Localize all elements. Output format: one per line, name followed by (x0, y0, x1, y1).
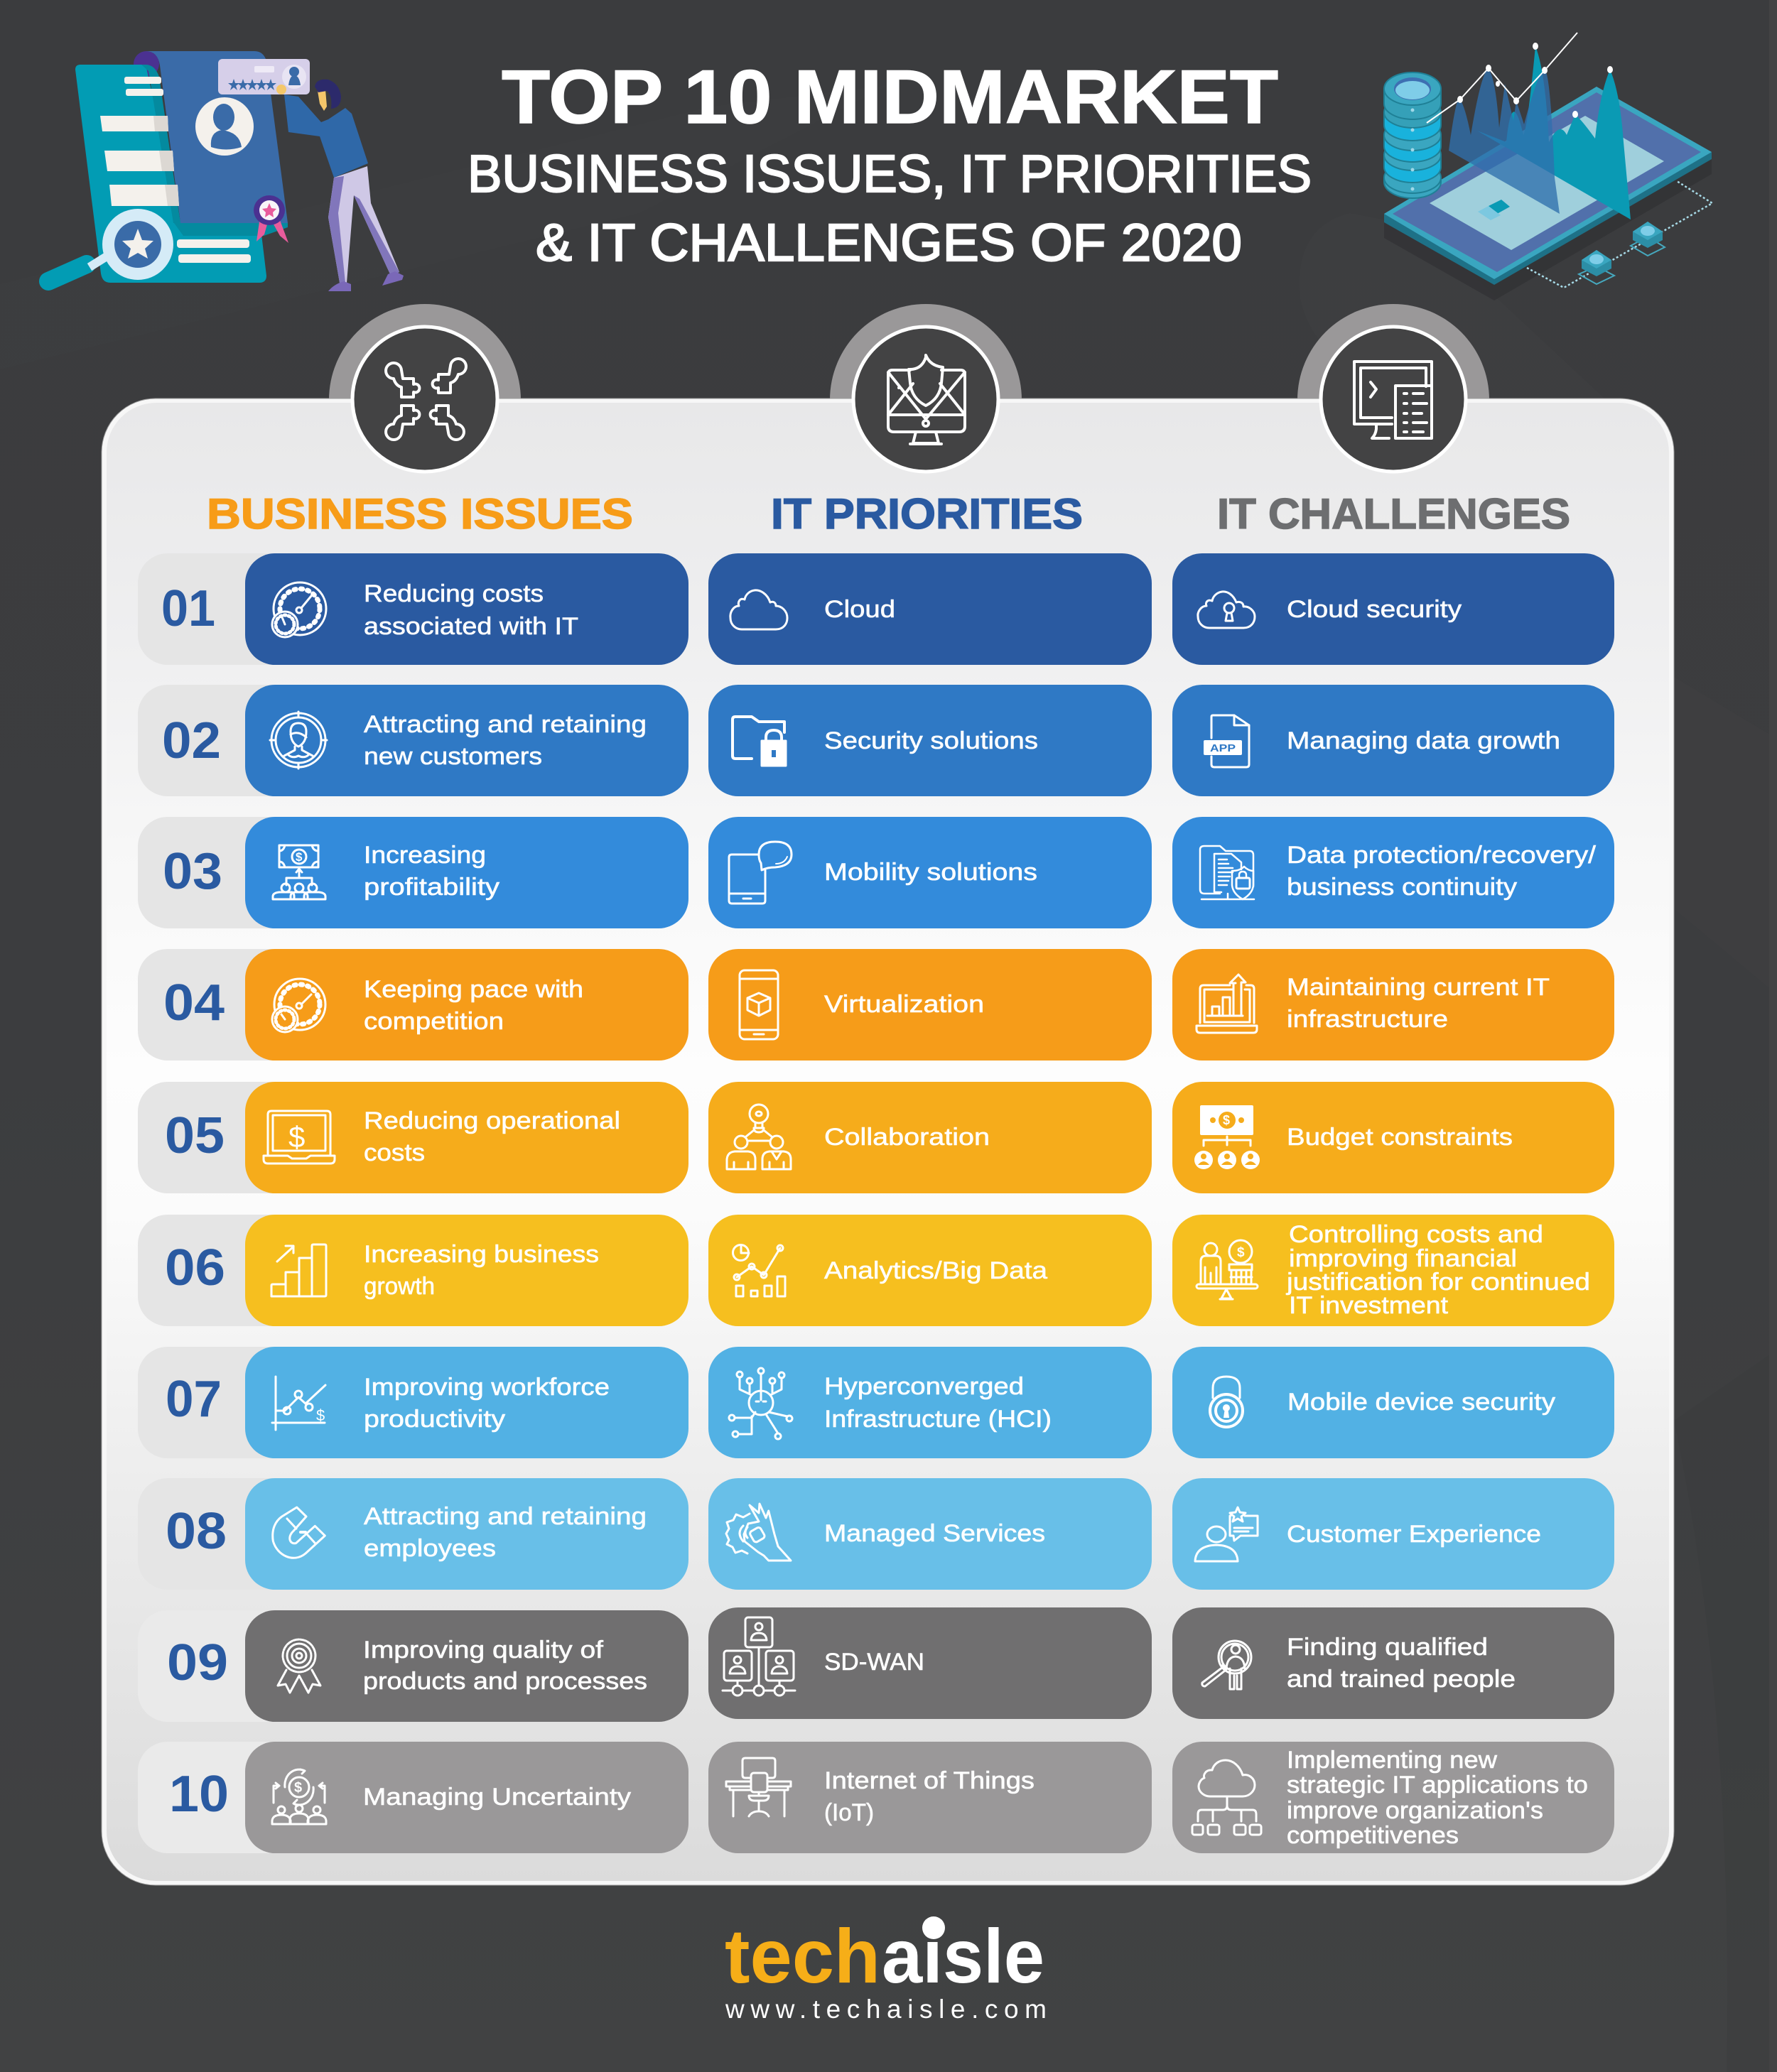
label: Data protection/recovery/ (1287, 842, 1597, 869)
label: Managing Uncertainty (363, 1784, 631, 1811)
icon: dollar cycle and team (272, 1769, 326, 1824)
card: managed services (708, 1478, 1152, 1590)
card: managing data growth (1172, 685, 1614, 796)
row number 06 (138, 1215, 344, 1326)
card: mobility solutions (708, 817, 1152, 928)
label: competitivenes (1287, 1822, 1459, 1849)
card: increasing profitability (245, 817, 688, 928)
label: infrastructure (1287, 1006, 1448, 1033)
icon: folder with lock (733, 717, 786, 766)
label: and trained people (1287, 1666, 1516, 1693)
icon arches behind panel (329, 304, 1489, 496)
icon: laptop with rising bars (1197, 975, 1257, 1033)
label (1286, 1221, 1590, 1319)
label (364, 1374, 610, 1433)
icon: money and people: $ (1223, 1113, 1230, 1127)
heading: business issues: BUSINESS ISSUES (207, 490, 633, 538)
icon: cloud with keyhole (1198, 592, 1255, 628)
row number 01 (138, 553, 344, 665)
label: Increasing business (364, 1241, 599, 1268)
label: Customer Experience (1287, 1521, 1541, 1548)
card: maintaining current IT infrastructure (1172, 949, 1614, 1061)
label: IT investment (1289, 1292, 1449, 1319)
row number 05 (138, 1082, 344, 1193)
label (364, 580, 578, 640)
row number 08 (138, 1478, 344, 1590)
label: Hyperconverged (824, 1373, 1024, 1400)
label: Maintaining current IT (1287, 974, 1550, 1001)
icon: scale with person and coins: $ (1237, 1245, 1245, 1260)
label (364, 1107, 620, 1166)
icon: laptop with dollar: $ (288, 1120, 305, 1154)
card: keeping pace with competition (245, 949, 688, 1061)
illustration: document review with person (48, 51, 404, 291)
title: TOP 10 MIDMARKET (502, 54, 1278, 139)
card: finding qualified and trained people (1172, 1607, 1614, 1719)
icon: money and people (1194, 1105, 1260, 1169)
label: (IoT) (824, 1799, 874, 1826)
icon: network of profile boxes (723, 1617, 795, 1696)
label (824, 1373, 1052, 1433)
heading: it challenges: IT CHALLENGES (1217, 490, 1570, 538)
row number 05: 05 (165, 1107, 225, 1164)
label: Cloud security (1287, 596, 1462, 623)
card: customer experience (1172, 1478, 1614, 1590)
label: Attracting and retaining (364, 1503, 647, 1530)
label: Controlling costs and (1289, 1221, 1543, 1248)
icon: target person (270, 712, 327, 769)
label: productivity (364, 1406, 505, 1433)
logo: techaisle: aisle (882, 1913, 1044, 1999)
title: BUSINESS ISSUES, IT PRIORITIES (468, 144, 1312, 203)
card: internet of things (iot) (708, 1742, 1152, 1853)
row number 02: 02 (162, 712, 221, 769)
label: justification for continued (1286, 1269, 1590, 1296)
label: associated with IT (364, 613, 578, 640)
label: Implementing new (1287, 1747, 1497, 1774)
icon: folder document shield (1200, 846, 1254, 899)
label: Analytics/Big Data (824, 1257, 1047, 1284)
row number 04: 04 (163, 975, 225, 1031)
label (364, 711, 647, 770)
label: Infrastructure (HCI) (824, 1406, 1052, 1433)
card: reducing costs associated with IT (245, 553, 688, 665)
icon: cloud network (1192, 1760, 1261, 1835)
icon: team with lightbulb (727, 1105, 791, 1169)
label: Increasing (364, 842, 486, 869)
label: improve organization's (1287, 1797, 1543, 1824)
logo: techaisle: tech (725, 1913, 880, 1999)
row number 04 (138, 949, 344, 1061)
row number 02 (138, 685, 344, 796)
row number 10: 10 (169, 1766, 229, 1823)
icon: line chart with dollar (272, 1377, 325, 1430)
card: mobile device security (1172, 1347, 1614, 1458)
icon: customer with rating bubble (1195, 1507, 1258, 1561)
label (1287, 1747, 1588, 1849)
label: Reducing costs (364, 580, 544, 607)
card: data protection/recovery/business continuity (1172, 817, 1614, 928)
label: new customers (364, 743, 542, 770)
label: Internet of Things (824, 1767, 1035, 1794)
icon: magnifier on person (1202, 1641, 1251, 1689)
illustration: tablet with data charts (1384, 33, 1712, 300)
row number 01: 01 (161, 580, 215, 637)
card: attracting and retaining new customers (245, 685, 688, 796)
label: Mobile device security (1287, 1389, 1555, 1416)
row number 07: 07 (166, 1371, 222, 1428)
label: costs (364, 1139, 425, 1166)
card: cloud (708, 553, 1152, 665)
label: products and processes (363, 1668, 647, 1695)
label: Improving quality of (363, 1637, 604, 1664)
row number 09 (138, 1610, 344, 1722)
label: Keeping pace with (364, 976, 583, 1003)
icon: rising bars (271, 1244, 326, 1296)
card: reducing operational costs (245, 1082, 688, 1193)
card: attracting and retaining employees (245, 1478, 688, 1590)
card: virtualization (708, 949, 1152, 1061)
column icon: it challenges terminal and list (1321, 327, 1466, 472)
label: Attracting and retaining (364, 711, 647, 738)
logo: techaisle (725, 1913, 1044, 1999)
card: controlling costs and improving financial justification for continued IT investment (1172, 1215, 1614, 1326)
card: analytics/big data (708, 1215, 1152, 1326)
icon: analytics (733, 1244, 785, 1296)
row number 03: 03 (163, 843, 222, 900)
icon: laptop with dollar (264, 1111, 335, 1164)
label: Managing data growth (1287, 727, 1560, 754)
icon: hand with gear (726, 1504, 791, 1561)
row number 07 (138, 1347, 344, 1458)
card: security solutions (708, 685, 1152, 796)
icon: app file: APP (1210, 742, 1236, 754)
card: improving workforce productivity (245, 1347, 688, 1458)
label: competition (364, 1008, 504, 1035)
card: hyperconverged infrastructure (HCI) (708, 1347, 1152, 1458)
icon: line chart with dollar: $ (316, 1406, 325, 1424)
column icon: it priorities shield mail monitor (853, 327, 998, 472)
label: employees (364, 1535, 496, 1562)
icon: circuit head (729, 1368, 792, 1439)
icon: scale with person and coins (1197, 1240, 1258, 1299)
icon: dollar cycle and team: $ (294, 1780, 302, 1796)
title (468, 54, 1312, 272)
row number 06: 06 (165, 1240, 225, 1296)
card: collaboration (708, 1082, 1152, 1193)
icon: phone and speech bubble (729, 842, 792, 904)
label: Reducing operational (364, 1107, 620, 1134)
label (364, 1503, 647, 1562)
label: business continuity (1287, 874, 1517, 901)
label: Managed Services (824, 1520, 1045, 1547)
label: Collaboration (824, 1124, 990, 1151)
icon: gauge (272, 979, 325, 1032)
label: Security solutions (824, 727, 1038, 754)
label: Cloud (824, 596, 895, 623)
icon: gauge (272, 582, 326, 637)
label (364, 1241, 599, 1300)
label: improving financial (1289, 1245, 1517, 1272)
label: Virtualization (824, 991, 984, 1018)
row number 03 (138, 817, 344, 928)
label: Budget constraints (1287, 1124, 1513, 1151)
card: managing uncertainty (245, 1742, 688, 1853)
label (1287, 974, 1550, 1033)
label: SD-WAN (824, 1649, 924, 1676)
label: profitability (364, 874, 499, 901)
title: & IT CHALLENGES OF 2020 (536, 213, 1242, 272)
panel: main table (102, 398, 1674, 1885)
label: growth (364, 1273, 435, 1300)
label: Finding qualified (1287, 1634, 1488, 1661)
row number 10 (138, 1742, 344, 1853)
label: Improving workforce (364, 1374, 610, 1401)
column icon: business issues puzzle (352, 327, 497, 472)
card: increasing business growth (245, 1215, 688, 1326)
label (364, 842, 499, 901)
icon: padlock (1210, 1377, 1243, 1427)
website url: www.techaisle.com (725, 1995, 1047, 2024)
icon: award rosette (278, 1639, 320, 1693)
label: strategic IT applications to (1287, 1772, 1588, 1799)
row number 09: 09 (167, 1634, 228, 1691)
label (363, 1637, 647, 1695)
card: improving quality of products and processes (245, 1610, 688, 1722)
card: budget constraints (1172, 1082, 1614, 1193)
card: cloud security (1172, 553, 1614, 665)
icon: magnet (273, 1507, 325, 1558)
heading: it priorities: IT PRIORITIES (771, 490, 1083, 538)
icon: cloud (730, 590, 787, 629)
icon: app file (1204, 715, 1249, 767)
card: sd-wan (708, 1607, 1152, 1719)
label (1287, 842, 1597, 901)
icon: phone with cube (740, 970, 778, 1039)
card: implementing new strategic IT applications (1172, 1742, 1614, 1853)
icon: desk and chair (726, 1758, 791, 1816)
label (1287, 1634, 1516, 1693)
label (364, 976, 583, 1035)
label: Mobility solutions (824, 859, 1037, 886)
row number 08: 08 (166, 1503, 227, 1560)
label (824, 1767, 1035, 1826)
icon: money and team (273, 845, 325, 899)
icon: money and team: $ (296, 850, 303, 864)
